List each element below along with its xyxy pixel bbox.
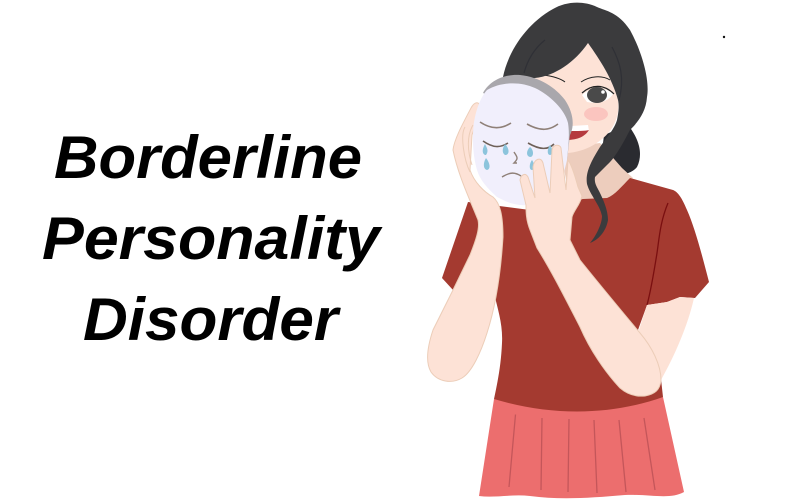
- hair: [503, 3, 648, 243]
- mask: [473, 83, 569, 205]
- eyebrows: [543, 75, 610, 82]
- title: [42, 124, 383, 353]
- mask nose and mouth: [502, 152, 521, 177]
- neck: [560, 143, 633, 202]
- hair strand lines: [524, 40, 622, 100]
- eye: [582, 86, 614, 103]
- back hair shadow: [600, 125, 640, 175]
- skirt pleats: [509, 414, 655, 493]
- title: Personality: [42, 205, 383, 272]
- cheek: [584, 107, 608, 121]
- forearm and right hand: [520, 145, 661, 396]
- title: Borderline: [54, 124, 362, 191]
- shirt: [442, 178, 709, 422]
- mask tears: [483, 144, 552, 170]
- illustration: woman holding a crying mask: [428, 3, 709, 498]
- mask rim: [483, 75, 573, 160]
- mouth: [569, 125, 589, 140]
- face: [535, 43, 618, 153]
- mask closed eyes: [483, 141, 554, 148]
- icon: small dot: [723, 36, 725, 38]
- left arm and hand: [428, 103, 503, 381]
- mask eyebrows: [480, 122, 558, 129]
- sleeve fold: [647, 203, 668, 305]
- title: Disorder: [83, 286, 342, 353]
- right upper arm: [638, 297, 694, 380]
- skirt: [479, 397, 684, 498]
